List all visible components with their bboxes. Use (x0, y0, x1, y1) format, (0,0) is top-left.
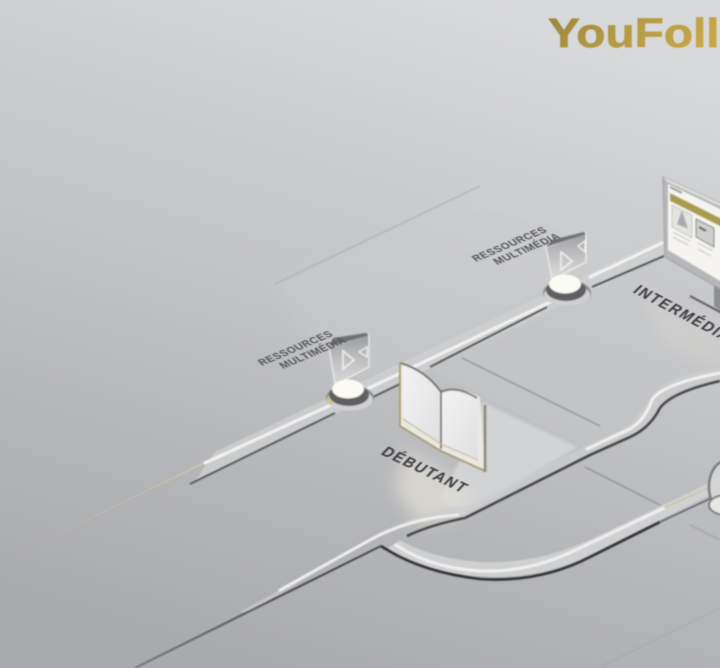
node: first multimedia resource (326, 333, 374, 411)
label: débutant: DÉBUTANT (377, 444, 472, 497)
label: ressources multimédia 1: MULTIMÉDIA (276, 334, 350, 371)
label: ressources multimédia 2 (469, 223, 564, 273)
label: ressources multimédia 1: RESSOURCES (255, 329, 336, 368)
label: ressources multimédia 2: MULTIMÉDIA (490, 230, 564, 267)
icon: desktop monitor (663, 177, 720, 313)
title: brand name: YouFoll (548, 11, 720, 56)
label: ressources multimédia 1 (255, 327, 350, 377)
node: third resource at right edge (709, 461, 720, 515)
icon: open book (400, 363, 485, 472)
lower track with branches (135, 368, 720, 668)
label: ressources multimédia 2: RESSOURCES (469, 225, 550, 264)
node: second multimedia resource (543, 232, 591, 306)
icon: video glass panel 2 (546, 232, 586, 280)
upper track to intermediate level (0, 238, 664, 562)
icon: video glass panel 1 (329, 333, 369, 385)
light floor panels (275, 186, 720, 668)
